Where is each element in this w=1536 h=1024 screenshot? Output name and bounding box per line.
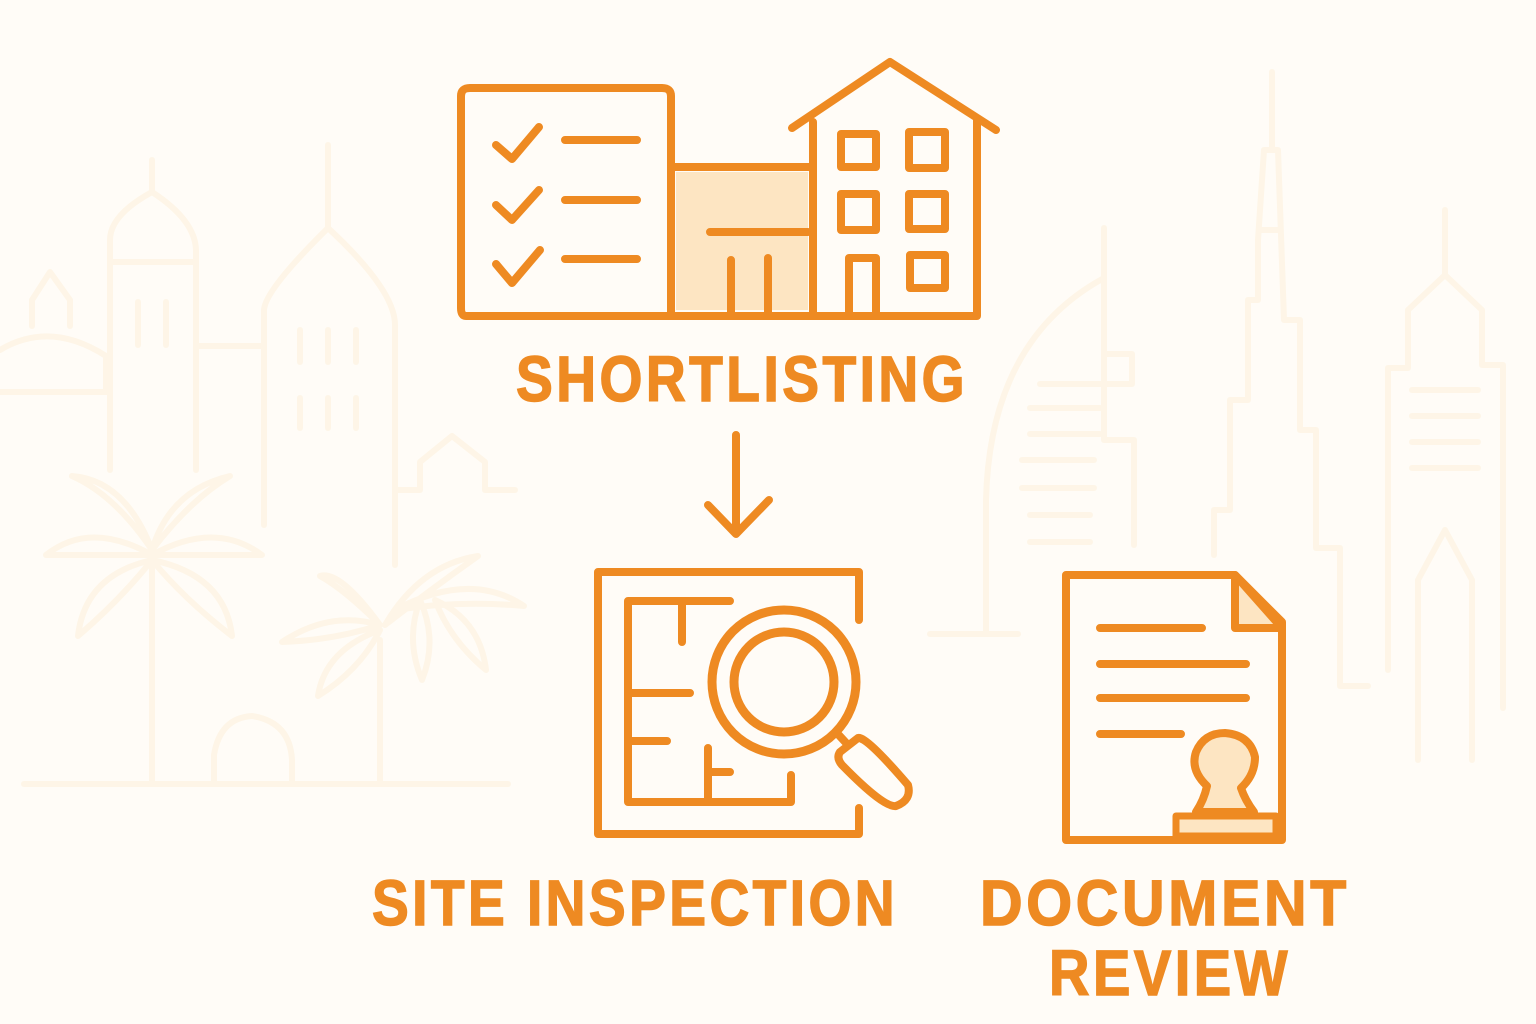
heading: document review: [980, 867, 1350, 1009]
review: REVIEW: [1049, 937, 1291, 1009]
icon: document with stamp: [1066, 575, 1282, 840]
page: [1066, 575, 1282, 840]
stamp: [1194, 733, 1255, 812]
arrow: shortlisting to site inspection: [708, 435, 769, 534]
building outline: [670, 62, 996, 316]
connecting block: [671, 167, 810, 312]
heading: shortlisting: SHORTLISTING: [516, 343, 968, 415]
shaded centre block: [676, 172, 808, 310]
folded corner: [1235, 575, 1282, 628]
icon: site inspection floor plan and magnifier: [598, 572, 909, 834]
frame: [598, 572, 859, 834]
check marks and lines: [496, 127, 637, 283]
icon: shortlisting checklist and building: [461, 62, 996, 316]
magnifier: [712, 610, 856, 754]
text lines: [1100, 628, 1246, 734]
background: faint city skyline with palms: [0, 72, 1503, 784]
building windows: [841, 132, 945, 312]
document: DOCUMENT: [980, 867, 1350, 939]
heading: site inspection: SITE INSPECTION: [372, 867, 898, 939]
checklist board: [461, 88, 671, 316]
floor plan walls: [628, 601, 791, 802]
